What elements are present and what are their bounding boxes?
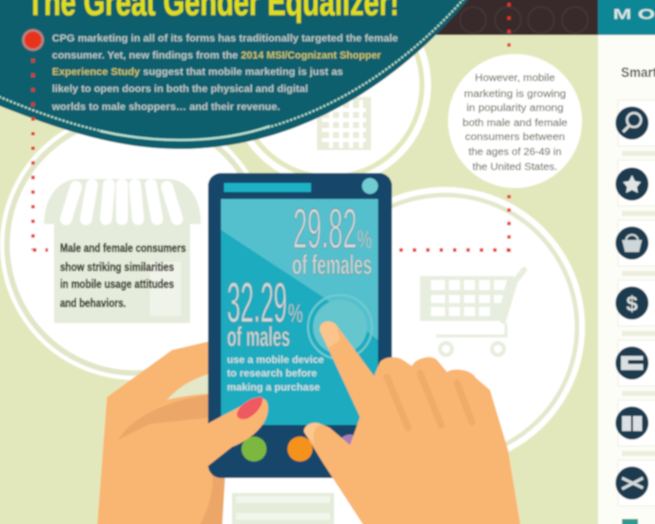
stat: males: % [288,298,303,328]
intro paragraph: worlds to male shoppers… and their revenue. [51,101,280,113]
sidebar heading: M O [613,6,655,23]
panel: bottom white form [215,478,385,524]
panel: teal title banner [0,0,472,149]
icon: dollar [616,286,648,320]
intro paragraph: likely to open doors in both the physical and digital [52,83,308,95]
text: left callout [60,243,186,310]
text: left callout: show striking similarities [60,262,174,274]
stat caption: to research before [227,368,317,380]
circle: small callout on mobile marketing: However, mobile [475,73,555,84]
intro paragraph: consumer. Yet, new findings from the [52,50,238,62]
circle: small callout on mobile marketing: the ages of 26-49 in [468,147,562,158]
icon: dollar: $ [626,293,638,316]
icon: star [616,168,648,200]
intro paragraph: suggest that mobile marketing is just as [143,66,343,78]
text: left callout: in mobile usage attitudes [60,279,174,291]
right hand [304,321,521,524]
circle: small callout on mobile marketing: the United States. [472,162,558,173]
circle: small callout on mobile marketing: marketing is growing [464,89,566,100]
intro paragraph: Experience Study [52,66,140,78]
panel: top dark band [420,0,598,35]
sidebar footer mark [622,519,638,524]
text: left callout: Male and female consumers [60,243,186,255]
circle: small callout on mobile marketing: consumers between [465,132,565,143]
list cards [618,100,655,506]
left thumb with red nail [180,397,268,490]
left hand palm [97,340,225,524]
intro paragraph: CPG marketing in all of its forms has traditionally targeted the female [52,32,398,44]
stat: females: 29.82 [293,197,357,261]
stat: females: of females [292,249,372,280]
panel: right sidebar [598,0,655,524]
circle: top middle with building [229,0,431,186]
icon: scissors [616,466,648,500]
intro paragraph [51,32,398,113]
icon: coupon [616,346,648,380]
stat: females [292,197,372,280]
icon: storefront [44,179,201,323]
icon: shopping cart [420,270,524,355]
stat caption: making a purchase [227,382,320,394]
stat: males: of males [227,321,290,352]
icon: search [616,106,648,140]
circle: small callout on mobile marketing: both male and female [462,118,568,129]
intro paragraph: 2014 MSI/Cognizant Shopper [241,50,381,62]
touch ripple [308,295,372,359]
circle: small callout on mobile marketing: in popularity among [466,103,564,114]
phone [208,173,392,478]
icon: red bullet [22,29,44,51]
stat: females: % [357,224,372,254]
stat caption: use a mobile device [227,354,324,366]
circle: small callout on mobile marketing [448,54,582,188]
circle: right with shopping cart [305,187,585,467]
stat: males [227,271,303,352]
icon: basket [616,226,648,260]
connector: red dotted lines [33,3,510,252]
stat: males: 32.29 [227,271,287,335]
circle: left with storefront [0,110,270,380]
text: left callout: and behaviors. [60,298,126,310]
phone buttons [242,434,362,462]
icon: calendar [616,406,648,440]
stat caption [227,354,324,394]
